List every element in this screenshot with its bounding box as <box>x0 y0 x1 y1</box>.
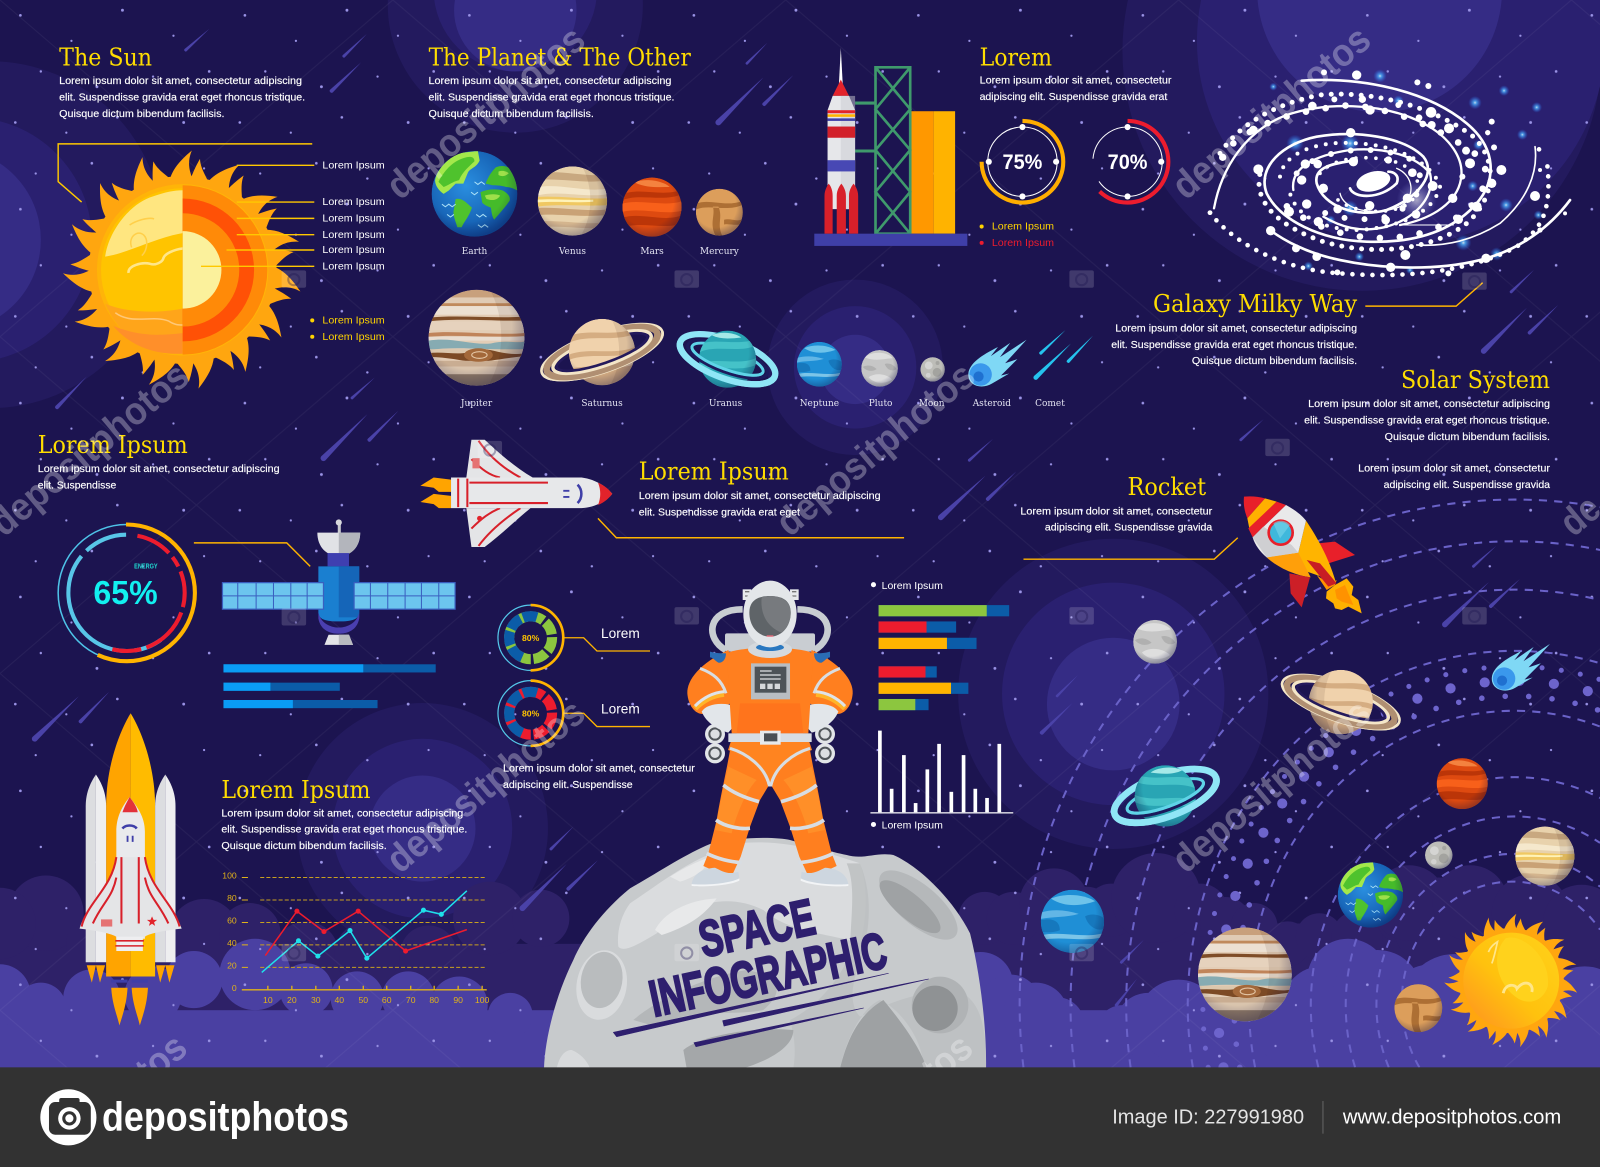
panel: launch tower <box>814 42 1172 249</box>
watermark camera icons <box>282 270 1487 961</box>
orbits <box>1020 500 1600 1067</box>
label: lorem 2 <box>563 701 650 727</box>
watermark text: depositphotos <box>378 18 593 208</box>
text block: Lorem ipsum dolor sit amet, consectetur adipiscing <box>639 491 881 502</box>
legend: Lorem Ipsum <box>992 222 1054 233</box>
text block: Lorem ipsum dolor sit amet, consectetur adipiscing <box>221 808 464 819</box>
planet labels: Uranus <box>709 399 743 409</box>
text block: elit. Suspendisse gravida erat eget rhoncus tristique. <box>221 825 467 836</box>
clouds: front layer <box>0 939 1600 1071</box>
chart: horizontal colored bars <box>871 581 1009 710</box>
icon: mercury <box>696 189 743 236</box>
text block: sun description: Quisque dictum bibendum facilisis. <box>59 109 224 120</box>
text block: sun description: elit. Suspendisse gravida erat eget rhoncus tristique. <box>59 93 305 104</box>
panel: the sun <box>58 42 385 390</box>
text block: planets description <box>429 76 674 120</box>
sun layer labels: Lorem Ipsum <box>322 230 385 241</box>
text block: planets description: elit. Suspendisse gravida erat eget rhoncus tristique. <box>429 93 674 104</box>
yellow legend: Lorem Ipsum <box>322 315 385 326</box>
callout lines <box>58 144 312 202</box>
legend <box>980 222 1054 249</box>
clouds: back layer <box>0 853 1600 1071</box>
diagram: solar system <box>1020 500 1600 1067</box>
planet labels: Pluto <box>869 399 892 409</box>
icon: mars <box>622 178 682 237</box>
planet labels: Asteroid <box>972 399 1011 409</box>
icon: neptune <box>1041 890 1104 953</box>
icon: sun <box>1444 914 1579 1048</box>
label: lorem 1 <box>563 626 650 651</box>
icon: saturn <box>1276 664 1405 740</box>
text block: solar system description: elit. Suspendisse gravida erat eget rhoncus tristique. <box>1304 415 1550 426</box>
label: lorem 2: Lorem <box>601 701 640 717</box>
heading: lorem: Lorem <box>980 42 1052 71</box>
text block: planets description: Quisque dictum bibendum facilisis. <box>429 109 594 120</box>
text block: galaxy description: elit. Suspendisse gravida erat eget rhoncus tristique. <box>1111 340 1357 351</box>
text block: adipiscing elit. Suspendisse gravida <box>1045 523 1213 534</box>
planet labels: Neptune <box>800 399 839 409</box>
planet labels: Moon <box>919 399 945 409</box>
text block: elit. Suspendisse <box>38 480 117 491</box>
chart: 75 percent ring <box>982 121 1063 203</box>
heading: solar system: Solar System <box>1401 365 1550 394</box>
text block: solar system description: Quisque dictum bibendum facilisis. <box>1385 432 1550 443</box>
icon: moon <box>920 357 945 382</box>
icon: uranus <box>1108 758 1223 834</box>
icon: moon <box>1133 620 1177 664</box>
illustration: horizontal space shuttle <box>420 440 612 547</box>
chart: line chart: 50 <box>358 995 368 1005</box>
heading: Lorem Ipsum <box>221 775 370 804</box>
text block <box>639 491 881 518</box>
text block: lorem description: adipiscing elit. Suspendisse gravida erat <box>980 92 1168 103</box>
logo wordmark: depositphotos <box>102 1094 349 1140</box>
icon: small moon <box>1425 841 1453 869</box>
sun layer labels: Lorem Ipsum <box>322 261 385 272</box>
planet labels: Jupiter <box>460 399 493 409</box>
icon: earth <box>1338 862 1403 928</box>
chart: line chart: 20 <box>287 995 297 1005</box>
illustration: rocket <box>1244 496 1362 613</box>
panel: solar system text <box>1304 365 1551 491</box>
sun layer labels: Lorem Ipsum <box>322 160 385 171</box>
illustration: moon with title <box>544 838 986 1068</box>
planet labels: Comet <box>1035 399 1065 409</box>
chart: red gauge <box>498 681 563 746</box>
chart: white column chart <box>870 731 1013 832</box>
watermark text: depositphotos <box>768 354 983 545</box>
icon: uranus <box>674 324 781 395</box>
chart: line chart: 10 <box>263 995 273 1005</box>
text block: galaxy description <box>1111 324 1357 367</box>
panel: gauges <box>498 605 696 791</box>
title: space infographic: INFOGRAPHIC <box>644 922 892 1027</box>
panel: line chart block <box>221 775 490 1005</box>
yellow legend <box>310 315 385 343</box>
icon: neptune <box>797 342 842 387</box>
text block <box>503 763 696 791</box>
chart: horizontal bars <box>223 664 436 708</box>
illustration: astronaut <box>687 581 853 886</box>
chart: line chart: 40 <box>227 938 237 948</box>
text block: lorem description <box>980 76 1172 103</box>
illustration: sun cross-section <box>62 151 303 390</box>
icon: mars <box>1437 758 1488 809</box>
yellow legend: Lorem Ipsum <box>322 332 385 343</box>
chart: line chart: 90 <box>453 995 463 1005</box>
panel: galaxy milky way <box>1111 283 1483 367</box>
icon: earth <box>432 151 517 237</box>
asteroid belt <box>1203 666 1600 1067</box>
icon: camera logo <box>40 1089 96 1145</box>
planet labels: Mars <box>640 247 664 257</box>
text block: adipiscing elit. Suspendisse <box>503 780 633 791</box>
icon: asteroid <box>968 340 1027 386</box>
text block <box>221 808 467 852</box>
chart: line chart: 30 <box>311 995 321 1005</box>
heading: Lorem Ipsum <box>38 430 188 459</box>
footer bar <box>0 1067 1600 1167</box>
panel: center lorem ipsum <box>598 457 904 538</box>
heading: the sun: The Sun <box>59 42 152 71</box>
chart: 75 percent ring: 75% <box>1003 150 1042 174</box>
chart: line chart: 80 <box>227 893 237 903</box>
chart: energy gauge 65 percent: ENERGY <box>134 562 158 570</box>
illustration: satellite <box>222 519 455 645</box>
icon: jupiter <box>429 290 524 386</box>
chart: line chart: 100 <box>475 995 490 1005</box>
connector line <box>1365 283 1483 306</box>
watermark text: tos <box>127 1026 195 1093</box>
chart: line chart: 60 <box>227 915 237 925</box>
connector line <box>1023 538 1238 559</box>
icon: comet <box>1492 644 1550 691</box>
text block: planets description: Lorem ipsum dolor sit amet, consectetur adipiscing <box>429 76 672 87</box>
panel: the planet and the other <box>429 42 1094 409</box>
illustration: milky way galaxy <box>1208 69 1570 276</box>
chart: green gauge <box>498 605 563 670</box>
website url: www.depositphotos.com <box>1342 1106 1561 1128</box>
title: space infographic: SPACE <box>694 888 820 968</box>
text block <box>1020 506 1213 534</box>
text block: galaxy description: Quisque dictum bibendum facilisis. <box>1192 356 1357 367</box>
text block: Quisque dictum bibendum facilisis. <box>221 841 387 852</box>
planet labels: Mercury <box>700 247 740 257</box>
chart: line chart: 100 <box>222 871 237 881</box>
sun layer labels: Lorem Ipsum <box>322 245 385 256</box>
heading: the planet and the other: The Planet & The Other <box>429 42 691 71</box>
chart: line chart: 70 <box>406 995 416 1005</box>
connector line <box>598 518 904 538</box>
heading: Rocket <box>1128 472 1206 501</box>
text block: lorem description: Lorem ipsum dolor sit amet, consectetur <box>980 76 1172 87</box>
chart: line chart: 40 <box>334 995 344 1005</box>
icon: jupiter <box>1198 928 1292 1021</box>
illustration: space shuttle with boosters <box>80 713 182 1026</box>
connector line <box>194 543 310 566</box>
chart: line chart <box>222 871 490 1005</box>
text block: solar system description <box>1304 399 1551 491</box>
text block: solar system description: adipiscing elit. Suspendisse gravida <box>1384 480 1550 491</box>
text block: Lorem ipsum dolor sit amet, consectetur <box>503 763 696 774</box>
chart: energy gauge 65 percent: 65% <box>93 575 158 612</box>
icon: saturn <box>535 312 669 392</box>
watermark text: depositphotos <box>1164 18 1379 208</box>
planet labels: Venus <box>558 247 586 257</box>
panel: left lorem ipsum and satellite <box>38 430 455 708</box>
chart: 70 percent ring <box>1087 121 1168 203</box>
sun layer labels: Lorem Ipsum <box>322 197 385 208</box>
icon: comets <box>1032 329 1094 381</box>
chart: red gauge: 80% <box>522 708 540 718</box>
icon: venus <box>1515 827 1574 886</box>
text block: Lorem ipsum dolor sit amet, consectetur adipiscing <box>38 464 280 475</box>
text block: solar system description: Lorem ipsum dolor sit amet, consectetur adipiscing <box>1308 399 1550 410</box>
icon: mercury <box>1394 984 1442 1032</box>
chart: green gauge: 80% <box>522 633 540 643</box>
chart: horizontal colored bars: Lorem Ipsum <box>882 581 943 592</box>
label: lorem 1: Lorem <box>601 626 640 642</box>
planet labels <box>460 247 1065 409</box>
icon: venus <box>538 166 607 236</box>
icon: pluto <box>861 350 898 387</box>
watermark text: depositphotos <box>378 691 593 881</box>
image id: Image ID: 227991980 <box>1112 1106 1304 1128</box>
heading: galaxy milky way: Galaxy Milky Way <box>1153 289 1357 318</box>
sun layer labels <box>322 160 385 272</box>
illustration: rocket on launch tower <box>814 48 967 246</box>
text block: elit. Suspendisse gravida erat eget <box>639 507 800 518</box>
text block <box>38 464 280 491</box>
watermark text: tos <box>913 1026 981 1093</box>
planet labels: Earth <box>462 247 487 257</box>
text block: galaxy description: Lorem ipsum dolor sit amet, consectetur adipiscing <box>1115 324 1357 335</box>
chart: line chart: 20 <box>227 960 237 970</box>
chart: 70 percent ring: 70% <box>1108 150 1147 174</box>
planet labels: Saturnus <box>581 399 623 409</box>
sun layer labels: Lorem Ipsum <box>322 213 385 224</box>
text block: sun description: Lorem ipsum dolor sit amet, consectetur adipiscing <box>59 76 302 87</box>
heading: Lorem Ipsum <box>639 457 789 486</box>
watermark text: depositphotos <box>1164 691 1379 881</box>
chart: white column chart: Lorem Ipsum <box>882 821 943 832</box>
chart: line chart: 0 <box>232 983 237 993</box>
text block: sun description <box>59 76 305 120</box>
chart: energy gauge 65 percent <box>58 524 195 661</box>
chart: line chart: 60 <box>382 995 392 1005</box>
text block: solar system description: Lorem ipsum dolor sit amet, consectetur <box>1358 463 1551 474</box>
title: space infographic <box>634 875 892 1027</box>
chart: line chart: 80 <box>429 995 439 1005</box>
panel: rocket text <box>1020 472 1238 559</box>
legend: Lorem Ipsum <box>992 238 1054 249</box>
text block: Lorem ipsum dolor sit amet, consectetur <box>1020 506 1213 517</box>
